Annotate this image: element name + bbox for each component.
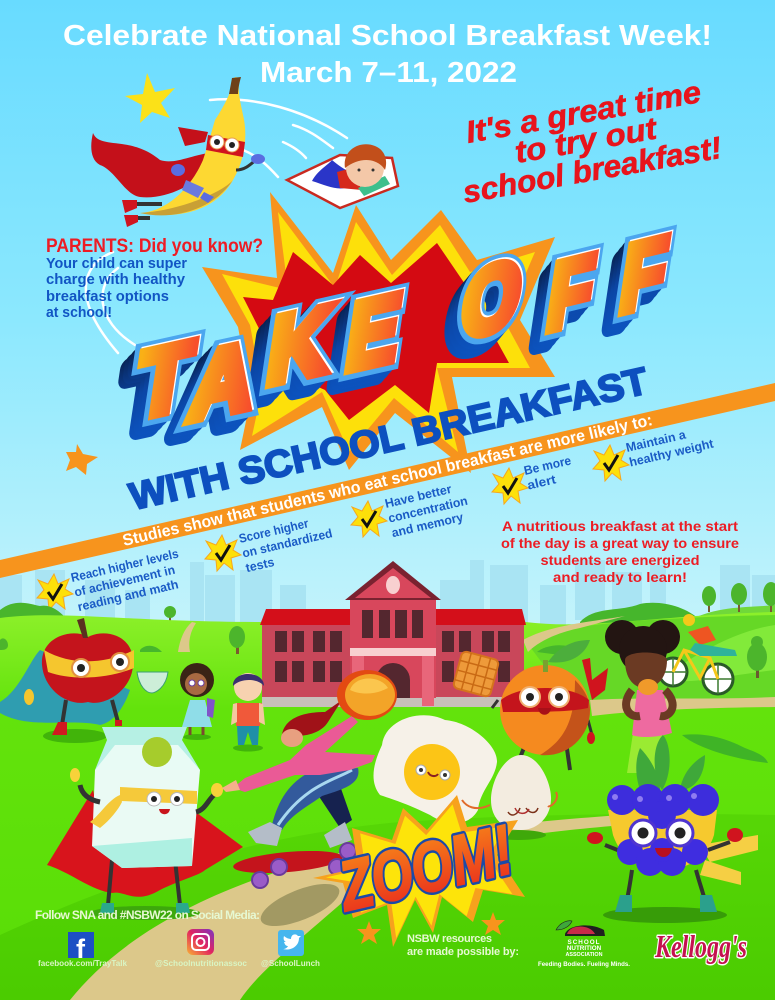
girl eating	[605, 620, 680, 773]
leaves	[636, 735, 705, 790]
tree right	[747, 636, 767, 678]
pink sweater	[233, 716, 375, 792]
mouth	[655, 848, 672, 857]
benefit: concentration	[351, 479, 472, 540]
headline: TAKE OFF: O	[455, 239, 528, 360]
city skyline	[0, 560, 775, 627]
benefit: alert	[492, 453, 576, 504]
subheading: with school breakfast: WITH SCHOOL BREAKFAST	[126, 360, 652, 519]
red italic slogan: school breakfast!	[460, 130, 724, 210]
red callout text	[501, 518, 739, 585]
kellogg's logo: Kellogg's	[654, 928, 747, 964]
headline: TAKE OFF: E	[340, 273, 407, 392]
benefit: test scores	[205, 512, 337, 575]
headline: TAKE OFF: T	[131, 319, 200, 438]
benefit: concentration: Have better	[384, 482, 453, 511]
zoom text: ZOOM!	[330, 810, 520, 926]
back hills and trees	[0, 582, 775, 640]
red italic slogan	[460, 74, 724, 210]
benefit: test scores: tests	[244, 555, 276, 575]
mask	[120, 787, 197, 804]
door	[376, 663, 410, 698]
bottle cap	[142, 737, 172, 767]
pastry	[337, 670, 397, 720]
headline: TAKE OFF: T	[120, 330, 189, 450]
wheels	[659, 658, 687, 686]
legs and red boots	[135, 204, 162, 218]
open book	[287, 155, 398, 208]
headline: TAKE OFF: F	[614, 216, 673, 334]
front leg	[272, 768, 358, 830]
parents text block: charge with healthy	[46, 272, 185, 288]
twitter	[261, 930, 320, 968]
headline: TAKE OFF: K	[261, 286, 338, 406]
benefit: test scores: Score higher	[238, 516, 310, 546]
headline: TAKE OFF: O	[456, 237, 530, 358]
headline: TAKE OFF: T	[125, 325, 194, 445]
lower ground	[0, 814, 775, 1000]
cape	[0, 650, 130, 725]
parents text block: Your child can super	[46, 256, 187, 272]
arms, gloves and belt	[236, 158, 258, 170]
benefit: concentration: and memory	[390, 510, 465, 540]
parents text block: at school!	[46, 305, 112, 321]
mitten	[24, 689, 34, 705]
girl student	[180, 663, 215, 740]
body	[500, 665, 590, 755]
red callout text: students are energized	[540, 552, 700, 568]
wings	[262, 625, 524, 697]
right-side field hills	[0, 615, 775, 763]
eyes and mouth	[520, 687, 540, 707]
school building	[260, 561, 526, 707]
headline: TAKE OFF: K	[256, 291, 333, 411]
headline: TAKE OFF	[115, 215, 675, 456]
social media heading: Follow SNA and #NSBW22 on Social Media:	[35, 908, 260, 922]
headline: TAKE OFF: E	[335, 277, 403, 397]
mask	[501, 688, 589, 712]
red cape	[47, 790, 243, 897]
grass	[0, 612, 775, 1000]
parents text block: breakfast options	[46, 289, 169, 305]
hair	[282, 700, 342, 736]
headline: TAKE OFF: A	[173, 331, 252, 451]
shoes	[248, 822, 282, 846]
egg white	[374, 715, 497, 823]
arms	[605, 842, 730, 853]
school nutrition association logo: NUTRITION	[567, 945, 602, 952]
fried egg character	[374, 715, 497, 823]
shadow	[43, 729, 107, 743]
headline: TAKE OFF: A	[185, 319, 264, 440]
icon: small orange star right	[481, 912, 505, 935]
benefit: healthy weight	[593, 422, 716, 481]
boy reading on flying book	[287, 144, 398, 208]
red italic slogan: to try out	[512, 110, 661, 170]
banana superhero	[91, 77, 265, 227]
orange banner	[0, 383, 775, 578]
headline: TAKE OFF: A	[168, 336, 248, 456]
benefit: achievement: Reach higher levels	[70, 547, 180, 585]
blueberry superhero	[587, 735, 758, 923]
headline: TAKE OFF: O	[446, 249, 520, 370]
yolk	[404, 744, 460, 800]
benefit: test scores: on standardized	[241, 526, 334, 561]
benefit: concentration: concentration	[387, 494, 469, 526]
central block	[350, 598, 436, 698]
wheels	[252, 843, 356, 888]
headline: TAKE OFF: K	[251, 295, 328, 416]
red callout text: of the day is a great way to ensure	[501, 535, 739, 551]
zoom burst	[313, 795, 525, 947]
shadow	[603, 907, 727, 923]
body	[312, 160, 350, 188]
facebook: f	[76, 934, 86, 964]
yellow cup face	[608, 810, 717, 870]
icon: yellow star	[125, 73, 175, 123]
red callout text: A nutritious breakfast at the start	[502, 518, 738, 534]
face	[416, 765, 426, 775]
title: March 7–11, 2022	[260, 57, 517, 89]
school nutrition association logo: SCHOOL	[568, 939, 600, 946]
banana body	[140, 77, 245, 215]
headline: TAKE OFF: F	[610, 221, 669, 339]
pink top	[632, 690, 672, 737]
orange banner: Studies show that students who eat school breakfast are more likely to:	[121, 411, 654, 550]
gable roof	[345, 561, 441, 600]
scarf	[582, 658, 608, 700]
red italic slogan: It's a great time	[463, 74, 704, 150]
scarf	[700, 835, 758, 885]
instagram: @Schoolnutritionassoc	[155, 958, 247, 968]
headline: TAKE OFF: A	[178, 326, 257, 447]
waffle	[453, 651, 499, 697]
benefit: healthy weight: healthy weight	[628, 436, 716, 470]
headline: TAKE OFF: K	[261, 286, 338, 406]
bike frame	[673, 650, 718, 679]
arms	[626, 690, 673, 716]
headline: TAKE OFF: F	[542, 233, 602, 350]
sponsor note	[407, 933, 519, 958]
headline: TAKE OFF: F	[615, 215, 675, 332]
top berries	[607, 784, 719, 829]
ground shadow	[255, 875, 345, 935]
base	[262, 695, 524, 707]
parents text block	[46, 236, 263, 321]
sponsor note: are made possible by:	[407, 946, 519, 958]
facebook: facebook.com/TrayTalk	[38, 958, 127, 968]
attic window	[386, 576, 400, 594]
back leg	[318, 780, 352, 828]
headline: TAKE OFF: A	[183, 321, 262, 442]
milk carton superhero	[47, 727, 243, 920]
headline: TAKE OFF: F	[606, 226, 665, 344]
legs	[627, 733, 664, 773]
headline: TAKE OFF: F	[614, 216, 673, 334]
food	[638, 679, 658, 695]
eyes and mouth	[147, 792, 161, 806]
icon: small orange star left	[357, 921, 381, 944]
legs	[520, 742, 570, 770]
carton body	[92, 770, 200, 868]
school nutrition association logo	[538, 921, 630, 968]
zoom burst: ZOOM!	[330, 810, 520, 926]
title: Celebrate National School Breakfast Week!	[63, 20, 712, 52]
starburst behind title	[202, 192, 555, 473]
ledge and pillars	[350, 648, 436, 656]
legs and boots	[108, 860, 180, 905]
headline: TAKE OFF: E	[341, 271, 409, 390]
arm	[492, 700, 592, 735]
benefit: achievement	[37, 547, 187, 614]
eyes	[630, 820, 656, 846]
headline: TAKE OFF: T	[130, 320, 199, 440]
headline: TAKE OFF: T	[115, 335, 184, 454]
small tree	[229, 626, 245, 654]
face	[625, 652, 667, 688]
hand	[222, 780, 240, 792]
rider	[688, 626, 716, 645]
benefit: alert: Be more	[523, 453, 572, 478]
headline: TAKE OFF: F	[602, 231, 661, 349]
arms and mittens	[80, 785, 214, 812]
headline: TAKE OFF: O	[455, 239, 528, 360]
school nutrition association logo: ASSOCIATION	[565, 952, 603, 958]
instagram	[155, 929, 247, 968]
headline: TAKE OFF: E	[331, 282, 398, 401]
windows	[275, 610, 510, 682]
headline: TAKE OFF: O	[450, 244, 524, 365]
headline: TAKE OFF: K	[247, 300, 324, 421]
benefit: alert: alert	[526, 472, 558, 493]
title	[63, 20, 712, 89]
headline: TAKE OFF: F	[537, 239, 596, 357]
headline: TAKE OFF: T	[130, 320, 199, 440]
sky background	[0, 0, 775, 640]
skateboard	[232, 847, 344, 877]
bowl	[137, 672, 168, 693]
cyclist	[659, 614, 737, 694]
whole egg character	[462, 755, 557, 840]
cape	[91, 133, 215, 197]
hair buns	[605, 620, 639, 654]
lower berries	[617, 838, 708, 876]
parents text block: PARENTS: Did you know?	[46, 236, 263, 257]
benefit: achievement: reading and math	[76, 577, 180, 614]
shadow	[90, 906, 200, 920]
benefit: healthy weight: Maintain a	[625, 427, 688, 455]
motion swirl lines	[86, 99, 347, 353]
benefit: achievement: of achievement in	[73, 563, 176, 600]
apple superhero	[0, 618, 168, 743]
orange superhero	[492, 640, 608, 770]
headline: TAKE OFF: F	[541, 234, 600, 352]
headline: TAKE OFF: F	[533, 244, 592, 362]
headline: TAKE OFF: K	[262, 284, 339, 404]
skater girl	[222, 700, 375, 935]
red callout text: and ready to learn!	[553, 569, 687, 585]
legs and boots	[62, 700, 118, 725]
legs and boots	[626, 870, 706, 905]
headline: TAKE OFF: F	[529, 249, 588, 367]
apple icon	[565, 925, 605, 936]
dirt paths	[178, 616, 775, 716]
lower path over ground	[70, 815, 620, 1000]
headline: TAKE OFF: A	[183, 321, 262, 442]
icon: orange star	[66, 444, 98, 475]
school nutrition association logo: Feeding Bodies. Fueling Minds.	[538, 961, 630, 968]
mask	[44, 650, 134, 678]
sponsor note: NSBW resources	[407, 933, 492, 945]
headline: TAKE OFF: E	[340, 273, 407, 392]
stem	[77, 618, 88, 638]
head and hair	[346, 149, 384, 187]
leaf	[548, 640, 590, 663]
facebook	[38, 932, 127, 968]
twitter: @SchoolLunch	[261, 958, 320, 968]
headline: TAKE OFF: E	[327, 287, 394, 406]
wing roofs	[260, 609, 526, 625]
boy student	[231, 673, 265, 752]
mask and eyes	[206, 135, 245, 157]
headline: TAKE OFF: O	[442, 254, 516, 375]
eyes	[72, 659, 90, 677]
headline: TAKE OFF: F	[541, 234, 600, 352]
head	[281, 729, 303, 747]
apple body	[42, 633, 133, 703]
